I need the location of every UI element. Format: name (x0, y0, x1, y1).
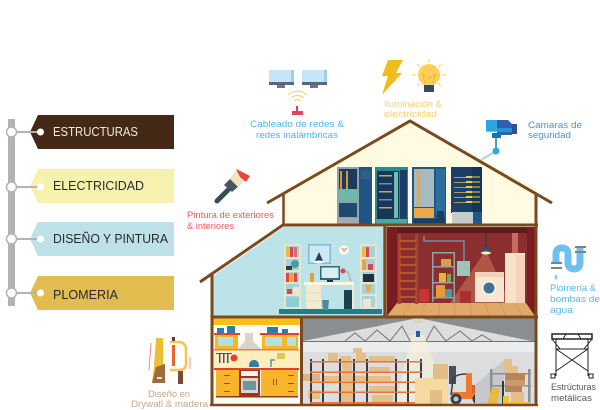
tag: electricidad (6, 169, 174, 203)
icon: camera (481, 120, 517, 160)
basement utility room (387, 227, 535, 317)
text: painting label line two: & interiores (187, 221, 234, 232)
icon: lightning bolt (382, 60, 403, 95)
tag: estructuras: ESTRUCTURAS (53, 124, 138, 139)
office room (213, 227, 383, 316)
boiler (505, 233, 525, 303)
hanging lamp (479, 233, 493, 254)
back racks (475, 359, 531, 404)
server rack 2 (375, 167, 408, 224)
computer monitor (320, 266, 340, 282)
kitchen (213, 318, 300, 404)
text: lighting label line two: electricidad (384, 109, 437, 120)
forklift (449, 366, 485, 404)
speaker (310, 273, 314, 282)
icon: saw and clamp (149, 337, 190, 384)
server rack 1 (337, 167, 372, 224)
service: drywall (131, 337, 209, 410)
text: plumbing label line two: bombas de (550, 294, 600, 305)
text: camera label: Camaras de (528, 120, 582, 131)
text: plumbing label: Plomería & (550, 283, 597, 294)
tag: estructuras (6, 115, 174, 149)
lower cabinets (216, 370, 298, 396)
icon: monitors and router (269, 70, 327, 115)
warehouse racks (310, 359, 422, 405)
left bookshelf (284, 244, 301, 309)
upper cabinets (214, 326, 299, 350)
icon: light bulb (412, 59, 446, 92)
text: network label: Cableado de redes & (250, 119, 345, 130)
ceiling lamp (395, 318, 450, 405)
service: plumbing (550, 246, 600, 316)
service: metal structures (551, 334, 596, 404)
ladder (398, 234, 418, 304)
desk (304, 282, 354, 309)
lamp shade (340, 268, 346, 274)
wall clock (339, 245, 349, 255)
red jerry can (419, 289, 429, 302)
panel: category list (6, 115, 174, 310)
wall poster (457, 261, 470, 276)
tag: electricidad: ELECTRICIDAD (53, 178, 144, 193)
text: drywall label: Diseño en (148, 389, 190, 400)
text: structures label line two: metálicas (551, 393, 592, 404)
text: drywall label line two: Drywall & madera (131, 399, 209, 410)
waste bin (322, 300, 329, 310)
washing machine (475, 272, 504, 302)
wall pipe (424, 236, 464, 261)
service: network cabling (250, 70, 345, 141)
text: lighting label: Iluminación & (384, 99, 443, 110)
utensils and kettle (216, 353, 285, 367)
red bin (460, 291, 471, 303)
attic room with server racks (284, 122, 536, 224)
range hood (238, 333, 261, 349)
house illustration (200, 121, 552, 406)
pc tower (344, 290, 352, 309)
tag: diseño y pintura: DISEÑO Y PINTURA (53, 231, 168, 246)
warehouse (303, 318, 536, 405)
text: network label line two: redes inalámbricas (256, 130, 338, 141)
counter (214, 368, 299, 370)
oven (239, 370, 260, 397)
text: painting label: Pintura de exteriores (187, 210, 274, 221)
right bookshelf (360, 244, 377, 309)
text: structures label: Estrúcturas (551, 382, 596, 393)
tag: diseño y pintura (6, 222, 174, 256)
cardboard boxes (303, 348, 395, 403)
ceiling truss (303, 326, 536, 342)
service: security camera (481, 120, 582, 160)
server rack 3 (412, 167, 446, 224)
text: camera label line two: seguridad (528, 130, 571, 141)
framed picture (308, 244, 331, 264)
server rack 4 (451, 167, 482, 224)
metal shelf (432, 252, 455, 302)
service: lighting (382, 59, 446, 120)
icon: paint brush (217, 168, 250, 201)
icon: pipe (551, 246, 586, 280)
icon: scaffold (551, 334, 593, 378)
tag: plomeria: PLOMERIA (53, 287, 118, 302)
roof and wall framing (200, 121, 552, 406)
stacked pallets (415, 364, 448, 404)
service: painting (187, 168, 274, 232)
desk lamp (342, 271, 351, 281)
tag: plomeria (6, 276, 174, 310)
text: plumbing label line three: agua (550, 305, 574, 316)
